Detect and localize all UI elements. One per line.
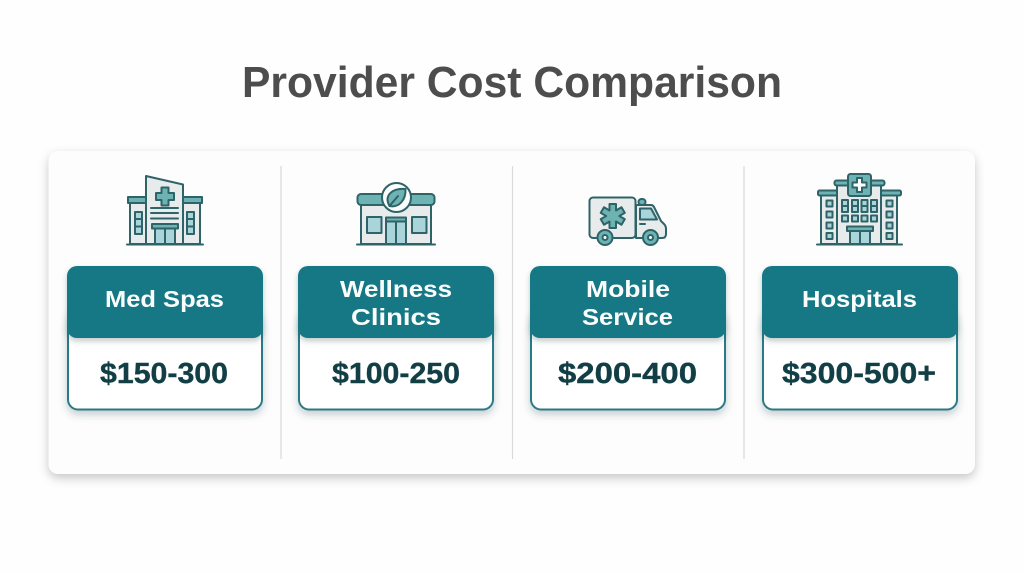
card: Med Spas [67,266,263,410]
card: Wellness Clinics: Wellness [340,276,452,302]
card: Hospitals: Hospitals [802,286,917,312]
card: Mobile Service: Mobile [586,276,670,302]
card: Hospitals: $300-500+ [782,358,936,390]
icon: ambulance [590,198,666,245]
icon: medical building [127,176,203,244]
title: Provider Cost Comparison [242,58,782,107]
card: Wellness Clinics: Clinics [351,304,441,330]
card: Hospitals [762,266,958,410]
card: Wellness Clinics [298,266,494,410]
card: Mobile Service: $200-400 [558,358,697,390]
panel: comparison container [48,151,975,474]
card: Med Spas: Med Spas [105,286,224,312]
icon: wellness clinic [357,183,435,244]
icon: hospital [817,174,902,244]
card: Mobile Service [530,266,726,410]
card: Med Spas: $150-300 [100,358,228,390]
card: Wellness Clinics: $100-250 [332,358,460,390]
card: Mobile Service: Service [582,304,673,330]
